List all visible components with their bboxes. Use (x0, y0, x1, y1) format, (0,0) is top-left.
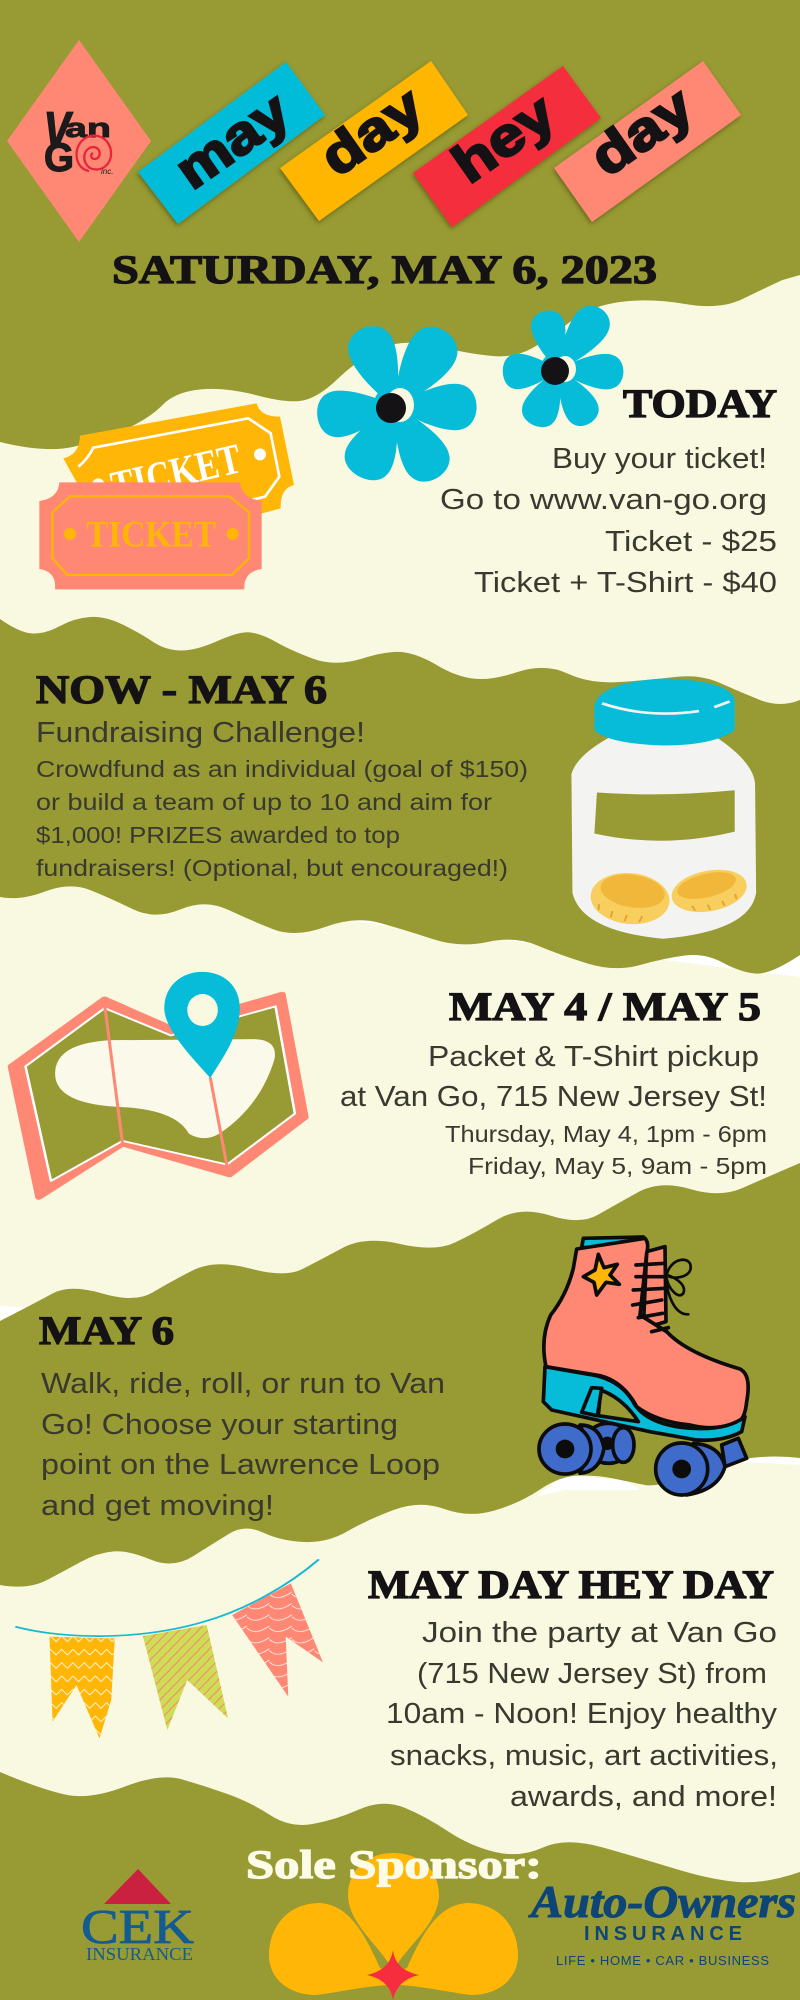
icon: roller skate (539, 1237, 748, 1495)
text block: fundraising (36, 717, 528, 881)
icon: large blue flower (315, 318, 477, 490)
banner: hey (413, 66, 601, 227)
text block: party details: awards, and more! (510, 1781, 777, 1813)
logo: Auto-Owners Insurance: INSURANCE (584, 1923, 742, 1945)
panel: cream band party (0, 1140, 800, 1900)
text block: ticket details: Go to www.van-go.org (440, 484, 767, 516)
logo: Van Go diamond: inc. (101, 167, 113, 176)
text block: ticket details: Buy your ticket! (552, 443, 767, 475)
panel: olive band fundraising (0, 617, 800, 974)
text block: ticket details: Ticket - $25 (605, 526, 777, 558)
heading: today: TODAY (623, 381, 777, 426)
panel: olive band may 6 (0, 1163, 800, 1587)
logo: CEK Insurance: INSURANCE (86, 1944, 193, 1964)
banner: second day: day (579, 76, 704, 188)
panel: olive footer (0, 1772, 800, 2000)
icon: tickets: TICKET (86, 515, 216, 556)
text block: pickup: Packet & T-Shirt pickup (428, 1041, 759, 1073)
icon: coin jar (571, 679, 756, 939)
text block: walk ride roll: point on the Lawrence Loop (41, 1449, 440, 1481)
icon: small blue flower (502, 299, 624, 432)
logo: Van Go diamond: an (65, 113, 111, 143)
banner: second day (554, 61, 741, 222)
banner: may: may (164, 81, 300, 201)
heading: may 6: MAY 6 (39, 1308, 174, 1353)
text block: party details: (715 New Jersey St) from (417, 1658, 767, 1690)
logo: Auto-Owners Insurance (528, 1876, 796, 1968)
text block: ticket details: Ticket + T-Shirt - $40 (474, 567, 777, 599)
text block: fundraising: fundraisers! (Optional, but encouraged!) (36, 855, 508, 881)
text block: pickup: Thursday, May 4, 1pm - 6pm (445, 1121, 767, 1147)
text block: party details: 10am - Noon! Enjoy healthy (386, 1698, 778, 1730)
logo: Van Go diamond: G (44, 136, 74, 180)
text block: party details: snacks, music, art activities, (390, 1740, 778, 1772)
text block: party details: Join the party at Van Go (422, 1617, 777, 1649)
icon: tickets: TICKET (107, 435, 246, 511)
text block: fundraising: $1,000! PRIZES awarded to top (36, 822, 400, 848)
logo: Auto-Owners Insurance: Auto-Owners (528, 1876, 796, 1927)
icon: tickets (39, 403, 294, 589)
heading: may 4 and may 5: MAY 4 / MAY 5 (449, 984, 761, 1029)
panel: cream band today and pickup (0, 275, 800, 1340)
text block: pickup (340, 1041, 767, 1179)
logo: Van Go diamond (7, 40, 151, 242)
text block: fundraising: Crowdfund as an individual (goal of $150) (36, 756, 528, 782)
text block: walk ride roll: Go! Choose your starting (41, 1409, 398, 1441)
text block: party details (386, 1617, 778, 1813)
text block: fundraising: Fundraising Challenge! (36, 717, 365, 749)
heading: now to may 6: NOW - MAY 6 (36, 667, 327, 712)
banner: may (138, 62, 325, 224)
heading: may day hey day: MAY DAY HEY DAY (368, 1562, 774, 1607)
heading: sole sponsor: Sole Sponsor: (246, 1842, 542, 1887)
logo: CEK Insurance: CEK (81, 1899, 194, 1954)
text block: ticket details (440, 443, 777, 599)
text block: pickup: Friday, May 5, 9am - 5pm (468, 1153, 767, 1179)
banner: day (280, 61, 468, 221)
logo: Van Go diamond: V (44, 102, 73, 158)
icon: map with pin (11, 972, 305, 1197)
banner: day: day (309, 76, 434, 188)
text block: pickup: at Van Go, 715 New Jersey St! (340, 1081, 767, 1113)
logo: Auto-Owners Insurance: LIFE • HOME • CAR • BUSINESS (556, 1953, 769, 1968)
text block: walk ride roll: Walk, ride, roll, or run to Van (41, 1368, 445, 1400)
icon: bunting (15, 1559, 323, 1738)
text block: walk ride roll (41, 1368, 445, 1522)
text block: walk ride roll: and get moving! (41, 1490, 274, 1522)
icon: yellow sponsor flower (269, 1853, 518, 2000)
text block: fundraising: or build a team of up to 10 and aim for (36, 789, 492, 815)
logo: CEK Insurance (81, 1869, 194, 1964)
title: event date: SATURDAY, MAY 6, 2023 (112, 247, 657, 292)
banner: hey: hey (441, 83, 566, 195)
